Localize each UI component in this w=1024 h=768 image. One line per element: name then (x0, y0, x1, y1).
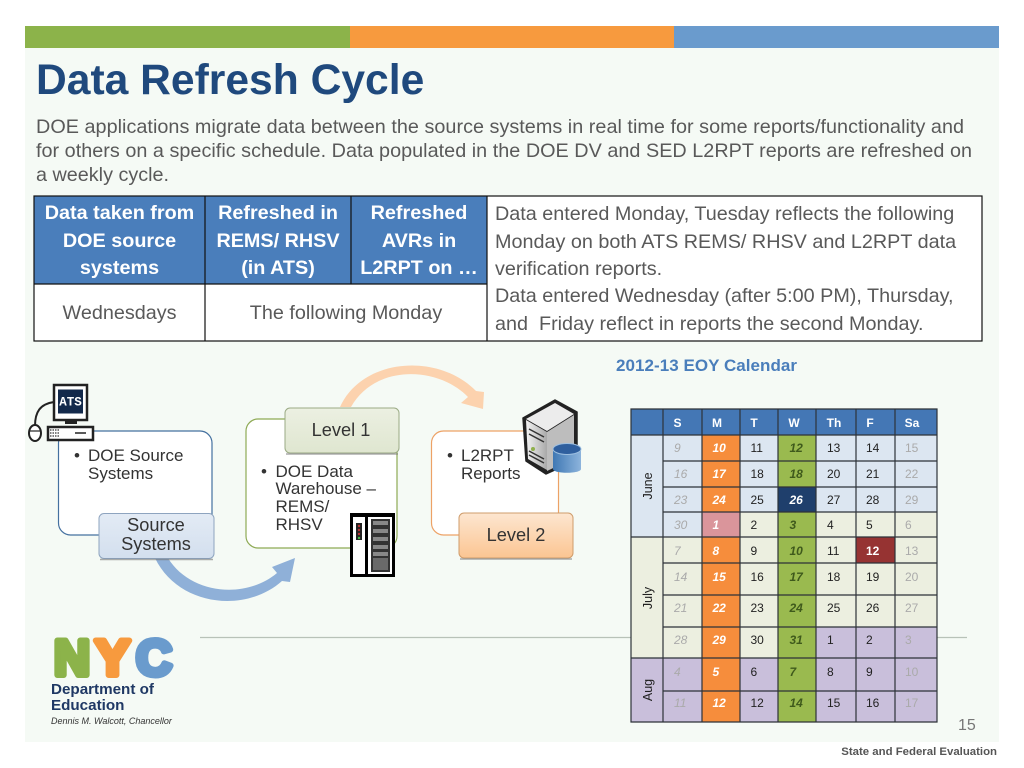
calendar heading: 2012-13 EOY Calendar (616, 356, 797, 375)
calendar dates: 19 (866, 570, 880, 584)
calendar dates: 9 (866, 665, 873, 679)
card: L2RPT reports (432, 431, 558, 535)
card: DOE data warehouse (246, 419, 397, 548)
calendar dates: 22 (905, 467, 919, 481)
calendar dates: 12 (866, 544, 880, 558)
label: source systems: Systems (121, 534, 191, 554)
calendar dates: 16 (750, 570, 764, 584)
calendar dates: 6 (750, 665, 758, 679)
calendar dates: 24 (712, 493, 726, 507)
calendar header row: S (673, 416, 682, 430)
calendar dates: 17 (790, 570, 804, 584)
icon: server rack (350, 513, 395, 577)
calendar dates: 24 (788, 601, 803, 615)
icon: database server (523, 400, 581, 474)
grid (631, 409, 937, 722)
arrow: level 1 to level 2 (340, 365, 484, 409)
calendar dates: 4 (827, 518, 834, 532)
calendar dates: 15 (712, 570, 726, 584)
icon: ATS computer (29, 385, 93, 441)
calendar dates: 21 (866, 467, 880, 481)
intro text block: a weekly cycle. (36, 164, 169, 186)
label: level 2 (459, 513, 573, 559)
calendar dates: 27 (905, 601, 919, 615)
NYC DOE logo: C (136, 630, 172, 686)
table notes: Monday on both ATS REMS/ RHSV and L2RPT data (495, 231, 956, 253)
calendar dates: 6 (905, 518, 912, 532)
calendar dates: 13 (905, 544, 919, 558)
calendar dates: 15 (905, 441, 919, 455)
calendar header row: F (866, 416, 874, 430)
calendar dates: 25 (750, 493, 764, 507)
table notes: and Friday reflect in reports the second Monday. (495, 313, 923, 335)
title: Data Refresh Cycle (36, 56, 424, 104)
NYC DOE logo (51, 630, 173, 726)
calendar dates: 14 (790, 696, 803, 710)
table header: REMS: (in ATS) (241, 257, 315, 279)
table header: L2RPT: L2RPT on … (360, 257, 478, 279)
calendar dates: 26 (788, 493, 803, 507)
calendar dates: 29 (905, 493, 919, 507)
calendar dates: 7 (674, 544, 682, 558)
calendar header row: M (712, 416, 722, 430)
table header: source: Data taken from (45, 202, 194, 224)
card: DOE data warehouse: DOE Data (276, 462, 354, 481)
calendar dates: 18 (750, 467, 764, 481)
calendar dates: 18 (790, 467, 803, 481)
table notes: Data entered Wednesday (after 5:00 PM), Thursday, (495, 285, 954, 307)
calendar dates: 2 (866, 633, 873, 647)
card: DOE source systems: DOE Source (88, 446, 183, 465)
calendar dates: 10 (712, 441, 726, 455)
calendar dates: 18 (827, 570, 841, 584)
NYC DOE logo: N (54, 630, 90, 686)
divider line (200, 636, 967, 638)
label: source systems: Source (127, 515, 185, 535)
table cell: Wednesdays: Wednesdays (62, 302, 177, 324)
card: DOE data warehouse: RHSV (276, 515, 323, 534)
month label: July: July (641, 586, 655, 609)
table notes: Data entered Monday, Tuesday reflects the following (495, 203, 954, 225)
calendar dates: 30 (674, 518, 688, 532)
card: DOE source systems: • (74, 446, 80, 465)
calendar dates: 10 (905, 665, 919, 679)
calendar dates: 12 (712, 696, 726, 710)
calendar dates: 9 (750, 544, 758, 558)
calendar dates: 27 (827, 493, 841, 507)
calendar dates: 28 (866, 493, 880, 507)
card: L2RPT reports: • (447, 446, 453, 465)
calendar dates: 11 (674, 696, 686, 710)
calendar dates: 1 (712, 518, 720, 532)
table header: REMS: Refreshed in (218, 202, 338, 224)
calendar dates: 7 (790, 665, 798, 679)
intro text block: DOE applications migrate data between the source systems in real time for some reports/functionality and (36, 116, 964, 138)
calendar dates: 23 (750, 601, 764, 615)
table notes: verification reports. (495, 258, 662, 280)
calendar dates: 5 (712, 665, 720, 679)
calendar dates: 11 (827, 544, 840, 558)
table header: REMS: REMS/ RHSV (216, 230, 340, 252)
calendar dates: 26 (866, 601, 880, 615)
NYC DOE logo: Education (51, 697, 124, 714)
table header: source: DOE source (63, 230, 176, 252)
intro text block (36, 116, 972, 186)
calendar dates: 9 (674, 441, 681, 455)
calendar dates: 12 (790, 441, 803, 455)
table header: L2RPT: AVRs in (382, 230, 456, 252)
calendar header row: T (750, 416, 758, 430)
NYC DOE logo: Dennis M. Walcott, Chancellor (51, 716, 173, 726)
calendar dates: 10 (790, 544, 803, 558)
month label: Aug: Aug (641, 679, 655, 701)
calendar dates: 15 (827, 696, 841, 710)
calendar dates: 5 (866, 518, 873, 532)
card: DOE source systems: Systems (88, 464, 153, 483)
calendar header row: Sa (905, 416, 920, 430)
calendar dates: 8 (712, 544, 720, 558)
card: L2RPT reports: L2RPT (461, 446, 514, 465)
label: source systems (99, 514, 214, 560)
arrow: source systems to level 1 (155, 558, 295, 601)
calendar dates: 8 (827, 665, 834, 679)
calendar dates: 12 (750, 696, 764, 710)
calendar dates: 23 (673, 493, 688, 507)
card: DOE data warehouse: Warehouse – (276, 479, 377, 498)
calendar dates: 28 (673, 633, 688, 647)
calendar dates: 20 (827, 467, 841, 481)
calendar header row (631, 409, 937, 435)
calendar (631, 409, 937, 722)
calendar dates: 16 (674, 467, 688, 481)
card: DOE source systems (58, 431, 212, 535)
calendar header row: Th (827, 416, 841, 430)
label: level 1 (285, 408, 399, 454)
top colour band (25, 26, 999, 48)
calendar dates: 4 (674, 665, 681, 679)
calendar dates (673, 441, 919, 710)
month label: June: June (641, 472, 655, 500)
intro text block: for others on a specific schedule. Data populated in the DOE DV and SED L2RPT reports are refreshed on (36, 140, 972, 162)
calendar dates: 3 (790, 518, 796, 532)
calendar header row: W (788, 416, 800, 430)
calendar dates: 17 (905, 696, 919, 710)
calendar dates: 25 (827, 601, 841, 615)
table header: source: systems (80, 257, 159, 279)
calendar dates: 22 (712, 601, 726, 615)
refresh schedule table (34, 196, 982, 341)
card: L2RPT reports: Reports (461, 464, 521, 483)
calendar dates: 17 (712, 467, 727, 481)
calendar dates: 2 (750, 518, 758, 532)
calendar dates: 14 (674, 570, 688, 584)
calendar dates: 13 (827, 441, 841, 455)
calendar dates: 11 (750, 441, 763, 455)
icon: ATS computer: ATS (59, 396, 82, 410)
calendar dates: 1 (827, 633, 834, 647)
calendar dates: 14 (866, 441, 880, 455)
month bands (631, 435, 937, 722)
calendar dates: 30 (750, 633, 764, 647)
table cell: following Monday: The following Monday (250, 302, 442, 324)
page number: 15 (958, 717, 976, 734)
table header: L2RPT: Refreshed (371, 202, 467, 224)
NYC DOE logo: Department of (51, 681, 155, 698)
calendar dates: 31 (790, 633, 803, 647)
calendar dates: 20 (905, 570, 919, 584)
card: DOE data warehouse: • (261, 462, 267, 481)
label: level 2: Level 2 (487, 525, 545, 545)
label: level 1: Level 1 (312, 420, 370, 440)
calendar dates: 21 (673, 601, 687, 615)
calendar dates: 3 (905, 633, 912, 647)
card: DOE data warehouse: REMS/ (276, 497, 330, 516)
footer: State and Federal Evaluation (841, 746, 997, 758)
NYC DOE logo: Y (95, 630, 130, 686)
calendar dates: 29 (712, 633, 726, 647)
highlight columns (702, 435, 895, 722)
calendar dates: 16 (866, 696, 880, 710)
